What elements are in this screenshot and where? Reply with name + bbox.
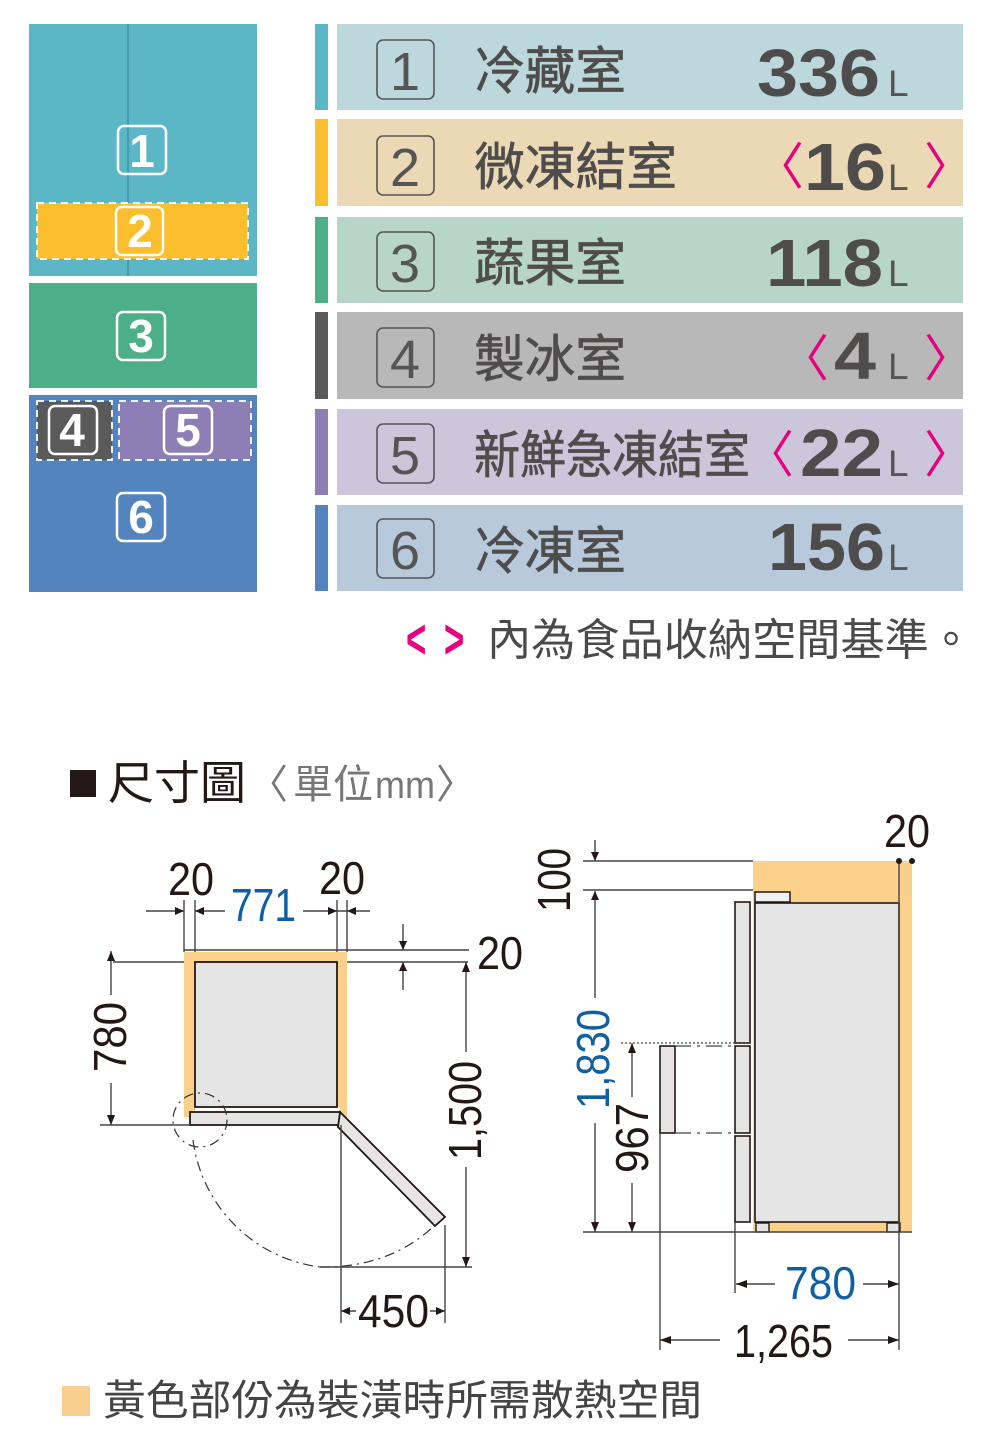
dimension: 100	[528, 840, 753, 998]
row 4 製冰室: 4	[834, 319, 876, 394]
compartment 6 freezer: 6	[128, 491, 154, 543]
compartment 5 quick freeze	[119, 401, 251, 460]
top view fridge body with clearance	[184, 950, 347, 1125]
dimension lines: width	[146, 852, 370, 952]
compartment 1 refrigerator	[29, 24, 257, 276]
row 6 冷凍室: L	[888, 537, 909, 578]
compartment 3 vegetable: 3	[128, 310, 154, 362]
row 6 冷凍室: 6	[390, 521, 420, 581]
row 2 微凍結室: L	[888, 157, 909, 198]
door swing arc	[173, 1093, 435, 1267]
compartment 6 freezer	[29, 395, 257, 592]
compartment 4 ice: 4	[59, 404, 85, 456]
dimension: 780 depth: 780	[84, 1002, 136, 1072]
compartment 2 soft freeze	[37, 203, 248, 259]
dimension: 1,500	[320, 962, 491, 1267]
row 4 製冰室	[315, 312, 974, 399]
heading: dimension drawing: 〉	[436, 763, 476, 807]
dimension: 450	[341, 1125, 445, 1337]
dimension: 1,265: 1,265	[734, 1315, 833, 1367]
row 5 新鮮急凍結室	[315, 409, 974, 495]
row 2 微凍結室: 2	[390, 138, 420, 198]
chart: top view diagram	[84, 852, 523, 1337]
row 5 新鮮急凍結室: 5	[390, 426, 420, 486]
row 2 微凍結室: 微凍結室	[474, 139, 677, 196]
dimension: 1,265	[660, 1133, 899, 1367]
dimension: 100: 100	[528, 848, 580, 912]
row 3 蔬果室: 118	[766, 226, 883, 301]
dimension lines: width: 771	[231, 879, 296, 931]
row 6 冷凍室	[315, 505, 963, 591]
dimension: 1,500: 1,500	[439, 1061, 491, 1160]
side view fridge body with clearance	[753, 861, 912, 1232]
row 1 冷藏室: 1	[390, 42, 420, 102]
dimension lines: width: 20	[319, 852, 365, 904]
side view doors	[735, 902, 750, 1222]
dimension lines: width: 20	[168, 853, 214, 905]
row 3 蔬果室: 蔬果室	[474, 235, 626, 292]
row 5 新鮮急凍結室: 新鮮急凍結室	[474, 427, 750, 484]
row 4 製冰室: 4	[390, 330, 420, 390]
panel: compartment map	[29, 24, 257, 592]
row 4 製冰室: 〈	[779, 331, 829, 387]
heading: dimension drawing: 單位	[293, 763, 373, 807]
compartment 4 ice	[37, 401, 112, 460]
dimension: 780 depth	[84, 951, 190, 1125]
row 3 蔬果室	[315, 217, 963, 303]
dimension: rear clearance 20	[884, 805, 930, 1350]
note: bracket meaning: >	[444, 608, 464, 670]
compartment 1 refrigerator: 1	[129, 125, 155, 177]
dimension: 967: 967	[606, 1103, 658, 1173]
row 5 新鮮急凍結室: L	[888, 443, 909, 484]
row 4 製冰室: 〉	[924, 331, 974, 387]
row 5 新鮮急凍結室: 〉	[924, 427, 974, 483]
compartment 3 vegetable	[29, 283, 257, 388]
legend: clearance note: 黃色部份為裝潢時所需散熱空間	[103, 1377, 702, 1424]
dimension: 780 depth: 780	[785, 1257, 856, 1309]
dimension: rear clearance 20: 20	[884, 805, 930, 857]
note: bracket meaning: <	[406, 608, 426, 670]
chart: side view diagram	[528, 805, 930, 1367]
row 5 新鮮急凍結室: 〈	[744, 427, 794, 483]
row 6 冷凍室: 冷凍室	[474, 523, 626, 580]
row 6 冷凍室: 156	[768, 510, 885, 585]
dimension: 967	[606, 1043, 658, 1232]
row 3 蔬果室: L	[888, 253, 909, 294]
dimension: clearance 20: 20	[477, 927, 523, 979]
compartment 5 quick freeze: 5	[175, 404, 201, 456]
open drawer door	[660, 1046, 675, 1133]
note: bracket meaning	[406, 608, 973, 670]
heading: dimension drawing: mm	[375, 765, 435, 807]
heading: dimension drawing	[70, 757, 476, 809]
open door	[338, 1112, 445, 1226]
dimension: 1,830 height: 1,830	[567, 1009, 619, 1109]
row 1 冷藏室: L	[888, 63, 909, 104]
note: bracket meaning: 內為食品收納空間基準。	[487, 616, 973, 665]
row 5 新鮮急凍結室: 22	[800, 416, 883, 491]
row 1 冷藏室	[315, 24, 963, 111]
heading: dimension drawing: 尺寸圖	[108, 757, 246, 809]
row 2 微凍結室	[315, 119, 974, 206]
row 2 微凍結室: 16	[804, 130, 886, 205]
row 3 蔬果室: 3	[390, 234, 420, 294]
row 2 微凍結室: 〉	[924, 139, 974, 195]
dimension: 780 depth	[583, 1222, 912, 1309]
dimension: clearance 20	[347, 924, 523, 990]
row 4 製冰室: L	[888, 346, 909, 387]
compartment 2 soft freeze: 2	[127, 205, 153, 257]
drawer travel lines	[621, 1043, 753, 1133]
dimension: 450: 450	[358, 1285, 429, 1337]
row 4 製冰室: 製冰室	[474, 331, 626, 388]
row 2 微凍結室: 〈	[754, 139, 804, 195]
heading: dimension drawing: 〈	[248, 763, 288, 807]
row 1 冷藏室: 336	[757, 36, 880, 111]
panel: capacity table	[315, 24, 974, 591]
row 1 冷藏室: 冷藏室	[474, 43, 626, 100]
dimension: 1,830 height	[567, 1009, 619, 1232]
